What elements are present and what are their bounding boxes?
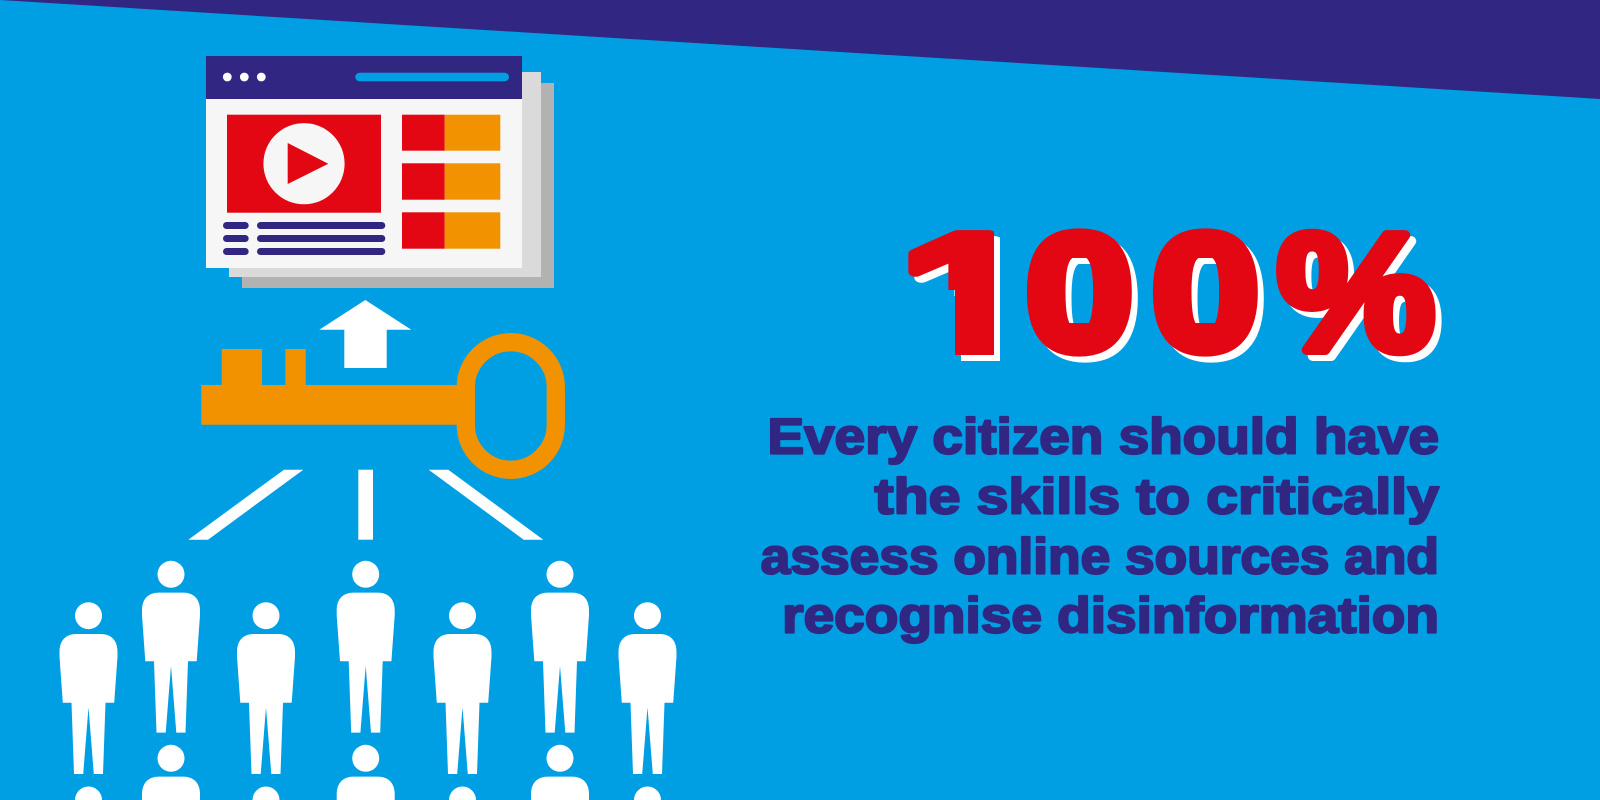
- headline figure: 100% with white shadow: [908, 228, 1442, 363]
- crowd of people icons: [60, 561, 676, 800]
- headline figure: 100% with white shadow: %: [1283, 206, 1441, 392]
- icon: key: [201, 342, 556, 470]
- statement text: the skills to critically: [874, 468, 1439, 524]
- icon: browser window with stacked pages: [206, 56, 554, 288]
- top banner wedge: [0, 0, 1600, 99]
- headline figure: 100% with white shadow: 0: [1157, 206, 1266, 392]
- headline figure: 100% with white shadow: 0: [1151, 200, 1260, 386]
- statement text: [761, 408, 1439, 644]
- statement text: recognise disinformation: [782, 588, 1439, 644]
- headline figure: 100% with white shadow: %: [1277, 200, 1435, 386]
- headline figure: 100% with white shadow: 1: [899, 200, 1034, 386]
- connector lines from people to key: [188, 470, 543, 540]
- statement text: Every citizen should have: [768, 408, 1439, 464]
- headline figure: 100% with white shadow: 1: [905, 206, 1040, 392]
- statement text: assess online sources and: [761, 528, 1439, 584]
- headline figure: 100% with white shadow: 0: [1025, 200, 1134, 386]
- arrow: up from key to browser: [319, 300, 411, 368]
- headline figure: 100% with white shadow: 0: [1031, 206, 1140, 392]
